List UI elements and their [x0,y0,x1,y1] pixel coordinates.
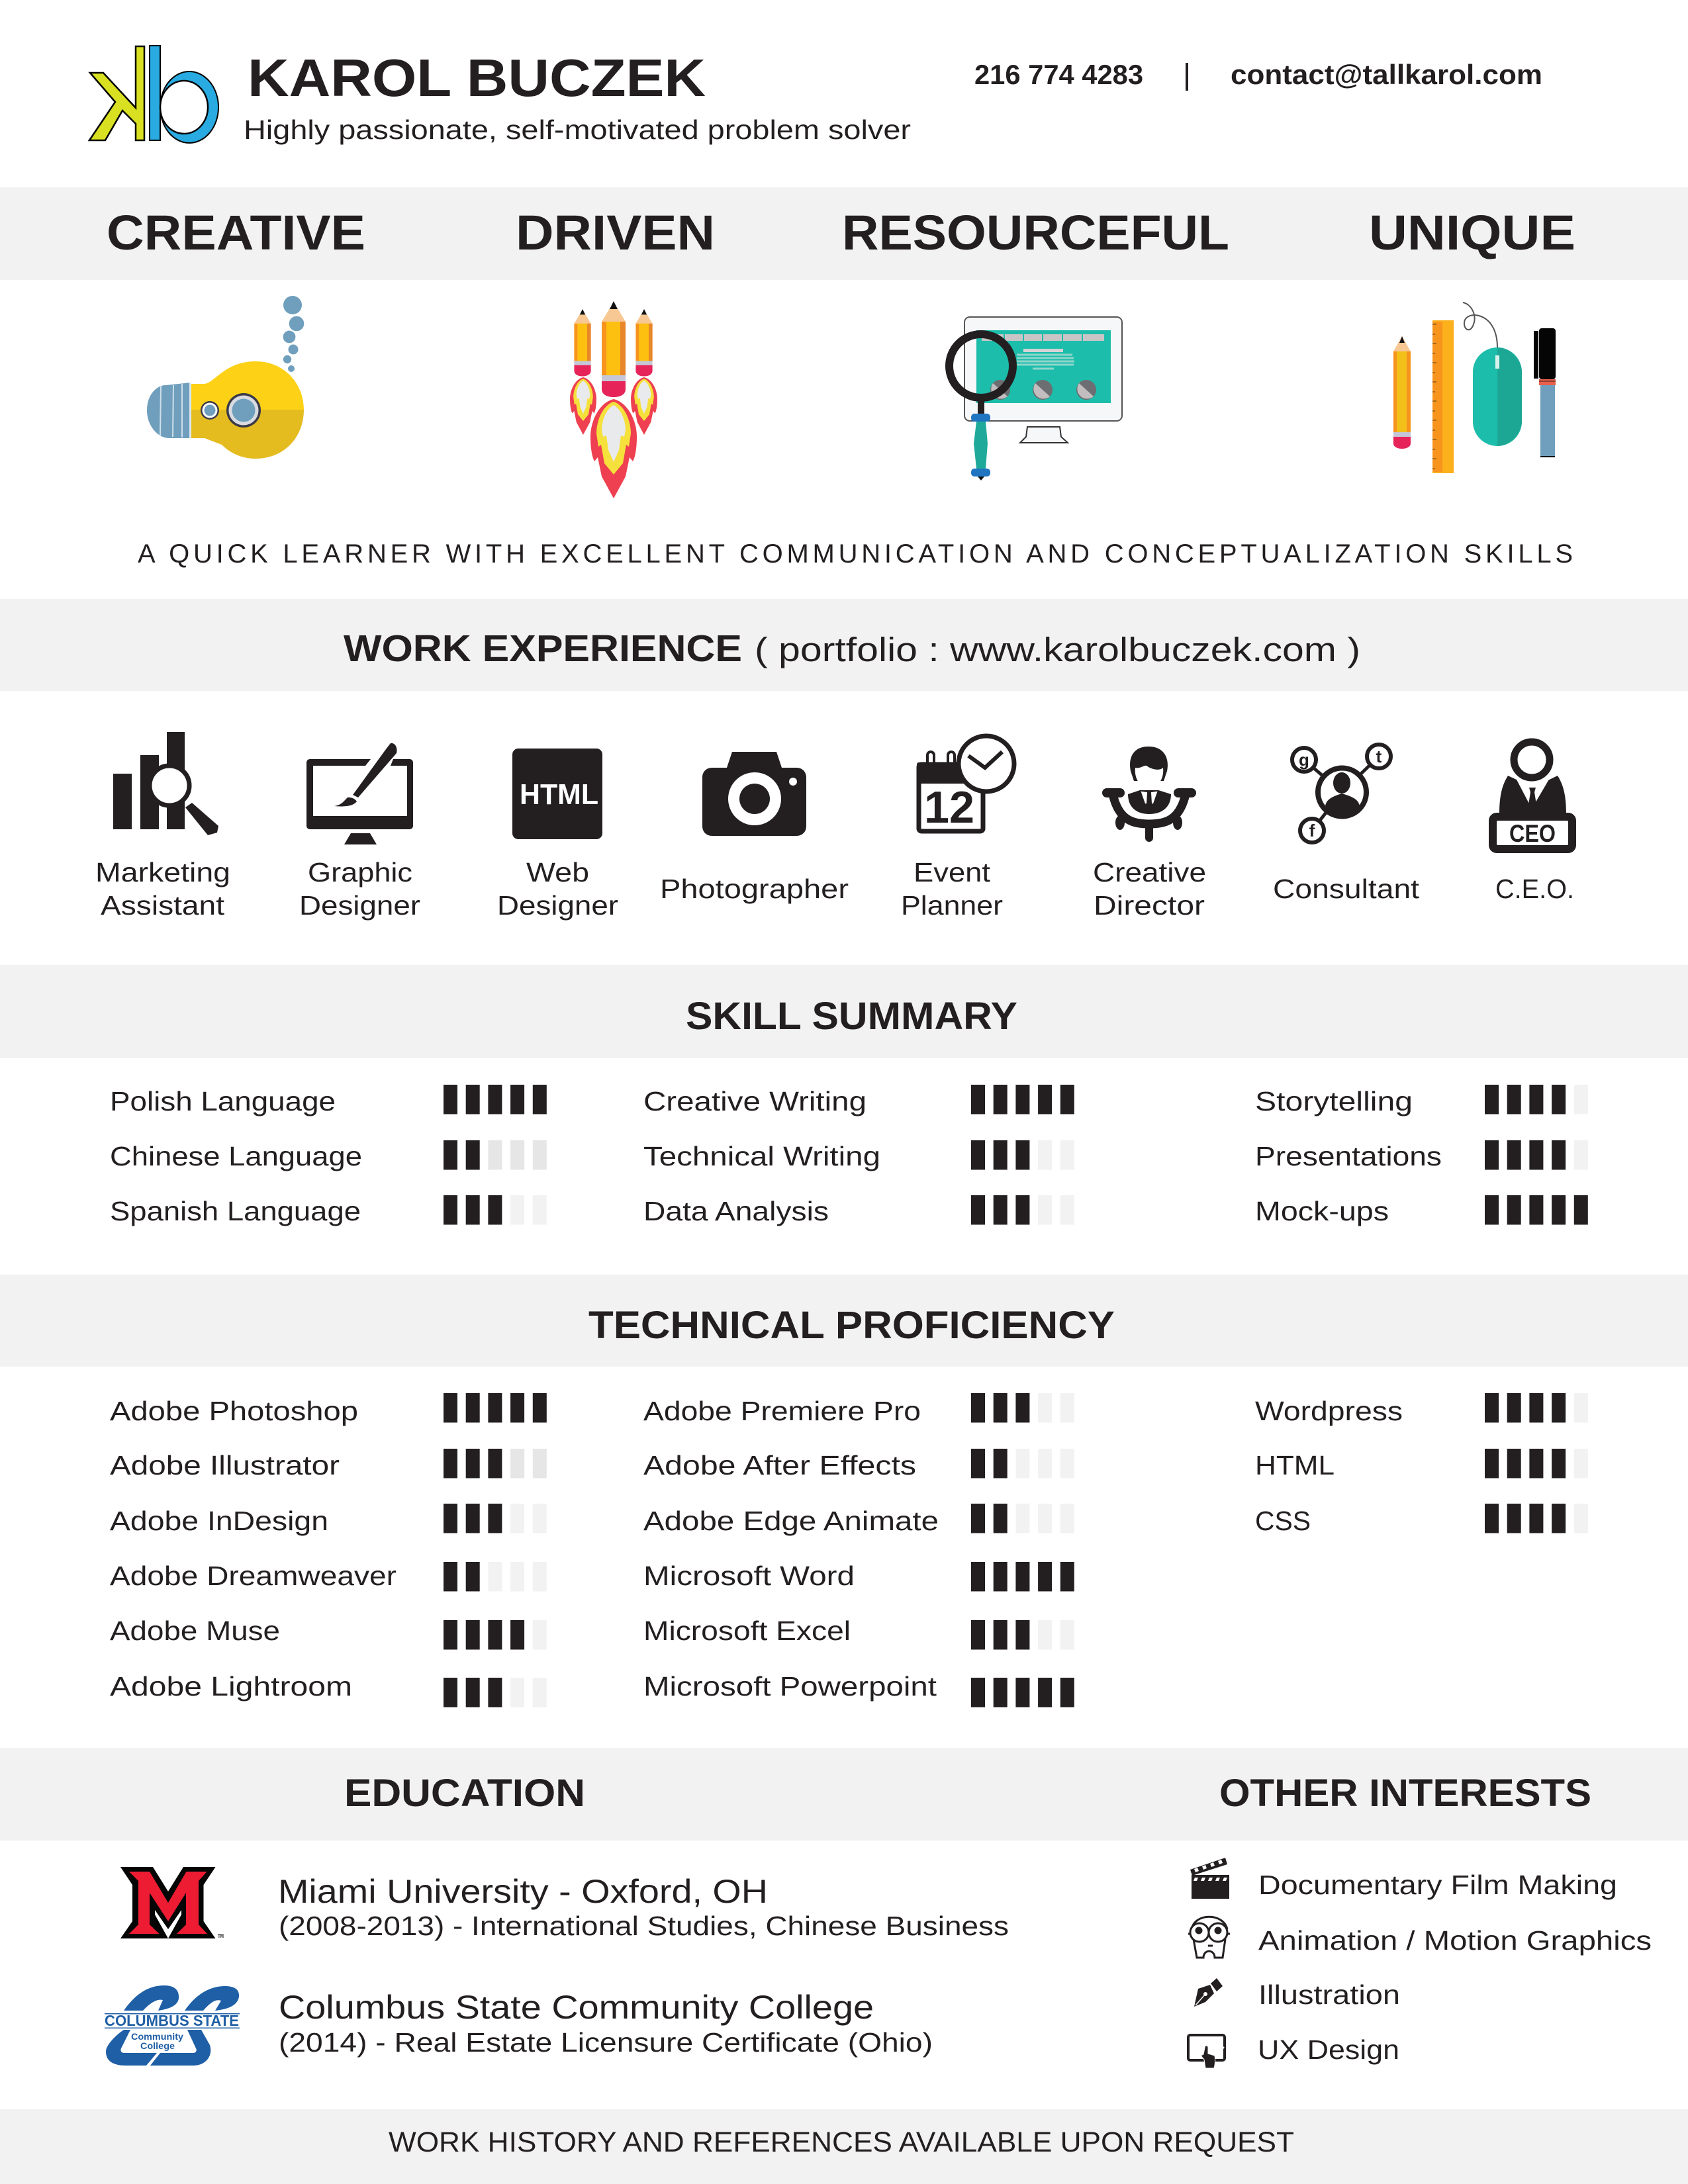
text: miami university [278,1873,1009,1941]
text: references note: WORK HISTORY AND REFERENCES AVAILABLE UPON REQUEST [389,2126,1294,2158]
label [95,857,230,921]
heading: skill summary: SKILL SUMMARY [686,995,1017,1038]
icon: ceo at podium: CEO [1509,820,1556,847]
heading: technical proficiency: TECHNICAL PROFICIENCY [588,1304,1115,1347]
skill: microsoft word: Microsoft Word [643,1561,855,1591]
job: event planner [901,736,1014,921]
skill: presentations: Presentations [1255,1141,1442,1171]
label: Illustration [1258,1979,1400,2010]
skill: mock-ups [1255,1195,1588,1226]
icon: social network person: f [1309,821,1315,841]
skill: html: HTML [1255,1450,1335,1480]
skill: adobe edge animate [643,1504,1074,1536]
skill: data analysis: Data Analysis [643,1196,829,1226]
traits band [0,187,1688,280]
skill: chinese language: Chinese Language [110,1141,362,1171]
interest: animation [1188,1917,1652,1958]
icon: ceo at podium [1489,742,1576,853]
education band [0,1748,1688,1841]
technical proficiency band [0,1275,1688,1367]
icon: calendar and clock [917,736,1014,833]
icon: calendar and clock: 12 [924,782,974,833]
job: creative director [1093,747,1206,921]
skill: wordpress [1255,1393,1588,1426]
icon: monitor under magnifier [949,317,1122,480]
skill: css [1255,1504,1588,1536]
panel: skill summary [0,965,1688,1226]
heading: other interests: OTHER INTERESTS [1219,1772,1591,1815]
label: Photographer [660,874,849,904]
label: Planner [901,890,1003,921]
skill: adobe after effects [643,1449,1074,1480]
job: ceo [1489,742,1576,904]
icon: tablet with hand [1188,2035,1225,2068]
label [901,857,1003,921]
skill: chinese language [110,1140,547,1171]
email: contact@tallkarol.com [1231,59,1542,90]
job: consultant [1273,745,1420,904]
panel: traits [0,187,1688,569]
skill: creative writing: Creative Writing [643,1086,867,1116]
label: UX Design [1258,2034,1399,2065]
skill: html [1255,1449,1588,1480]
text: miami university: Miami University - Oxford, OH [278,1873,768,1910]
heading: unique: UNIQUE [1369,205,1575,260]
skill: adobe after effects: Adobe After Effects [643,1450,916,1480]
skill: adobe premiere pro: Adobe Premiere Pro [643,1396,921,1426]
skill: adobe illustrator [110,1449,547,1480]
heading: creative: CREATIVE [107,205,365,260]
text: portfolio link: ( portfolio : www.karolbuczek.com ) [755,631,1360,668]
skill summary band [0,965,1688,1058]
skill: adobe dreamweaver: Adobe Dreamweaver [110,1561,397,1591]
skill: adobe muse: Adobe Muse [110,1615,280,1646]
label: Event [914,857,991,887]
interest: illustration [1194,1978,1400,2010]
panel: technical proficiency [0,1275,1688,1707]
icon: columbus state logo [105,1985,240,2066]
skill: polish language: Polish Language [110,1086,336,1116]
skill: adobe photoshop [110,1393,547,1426]
skill: adobe lightroom [110,1671,547,1707]
heading: driven: DRIVEN [516,205,715,260]
icon: pen nib [1194,1978,1223,2007]
skill: microsoft powerpoint [643,1671,1074,1707]
label: Assistant [101,890,225,921]
icon: pencil rockets [570,301,657,498]
job: photographer [660,752,849,904]
label [497,857,618,921]
icon: monitor with brush [306,743,413,844]
skill: data analysis [643,1195,1074,1226]
skill: microsoft powerpoint: Microsoft Powerpoint [643,1671,937,1702]
skill: microsoft excel [643,1615,1074,1649]
skill: adobe premiere pro [643,1393,1074,1426]
label: Web [526,857,589,887]
footer band [0,2109,1688,2184]
icon: clapperboard [1190,1858,1229,1899]
work experience band [0,599,1688,691]
label: Designer [497,890,618,921]
icon: columbus state logo: COLUMBUS STATE [105,2012,239,2029]
label: Marketing [95,857,230,887]
tagline: Highly passionate, self-motivated problem solver [244,114,911,145]
skill: mock-ups: Mock-ups [1255,1196,1389,1226]
skill: technical writing: Technical Writing [643,1141,880,1171]
skill: adobe indesign [110,1504,547,1536]
label: Designer [299,890,420,921]
icon: miami m logo [120,1867,224,1939]
panel: work experience [0,599,1688,921]
skill: spanish language: Spanish Language [110,1196,361,1226]
skill: microsoft excel: Microsoft Excel [643,1615,851,1646]
label: Consultant [1273,874,1420,904]
icon: social network person: t [1376,747,1382,766]
icon: miami m logo: TM [218,1933,224,1939]
skill: creative writing [643,1085,1074,1116]
icon: columbus state logo: Community [131,2031,183,2042]
skill: adobe edge animate: Adobe Edge Animate [643,1506,939,1536]
heading: work experience: WORK EXPERIENCE [344,627,742,670]
text: columbus state community college [279,1989,933,2058]
skill: adobe dreamweaver [110,1561,547,1591]
skill: adobe illustrator: Adobe Illustrator [110,1450,340,1480]
icon: columbus state logo: College [140,2040,175,2051]
label: C.E.O. [1495,874,1574,904]
skill: spanish language [110,1195,547,1226]
icon: kb logo [89,46,218,143]
text: columbus state community college: Columbus State Community College [279,1989,874,2026]
icon: director at helm [1107,747,1192,838]
skill: adobe photoshop: Adobe Photoshop [110,1396,358,1426]
header [89,46,1542,145]
label: Graphic [308,857,412,887]
text: columbus state community college: (2014) - Real Estate Licensure Certificate (Ohio) [279,2027,933,2058]
skill: storytelling [1255,1085,1588,1116]
icon: light bulb [147,296,304,459]
name: KAROL BUCZEK [248,48,706,107]
skill: storytelling: Storytelling [1255,1086,1413,1116]
icon: social network person [1292,745,1391,842]
icon: html page: HTML [520,778,598,811]
phone: 216 774 4283 [974,59,1143,90]
label: Animation / Motion Graphics [1258,1925,1652,1956]
text: miami university: (2008-2013) - International Studies, Chinese Business [279,1911,1009,1941]
icon: bar chart magnifier [113,732,218,835]
text: quick learner statement: A QUICK LEARNER WITH EXCELLENT COMMUNICATION AND CONCEPTUALIZATION SKILLS [138,539,1573,569]
job: marketing assistant [95,732,230,921]
heading: education: EDUCATION [344,1772,585,1815]
skill: polish language [110,1085,547,1116]
icon: cartoon character [1188,1917,1230,1958]
skill: adobe muse [110,1615,547,1649]
skill: microsoft word [643,1561,1074,1591]
label [1093,857,1206,921]
icon: social network person: g [1299,750,1309,770]
skill: technical writing [643,1140,1074,1171]
icon: html page [512,749,602,839]
icon: pencil ruler mouse marker [1393,302,1556,473]
label [299,857,420,921]
label: Director [1094,890,1205,921]
separator [1186,63,1188,91]
job: web designer [497,749,618,921]
panel: education and interests [0,1748,1688,2068]
skill: presentations [1255,1140,1588,1171]
footer [0,2109,1688,2184]
skill: adobe lightroom: Adobe Lightroom [110,1671,352,1702]
icon: camera [702,752,806,836]
interest: ux design [1188,2034,1399,2068]
heading: resourceful: RESOURCEFUL [842,205,1229,260]
label: Documentary Film Making [1258,1870,1617,1900]
job: graphic designer [299,743,420,921]
interest: film making [1190,1858,1617,1900]
skill: wordpress: Wordpress [1255,1396,1403,1426]
label: Creative [1093,857,1206,887]
skill: css: CSS [1255,1506,1311,1536]
skill: adobe indesign: Adobe InDesign [110,1506,328,1536]
